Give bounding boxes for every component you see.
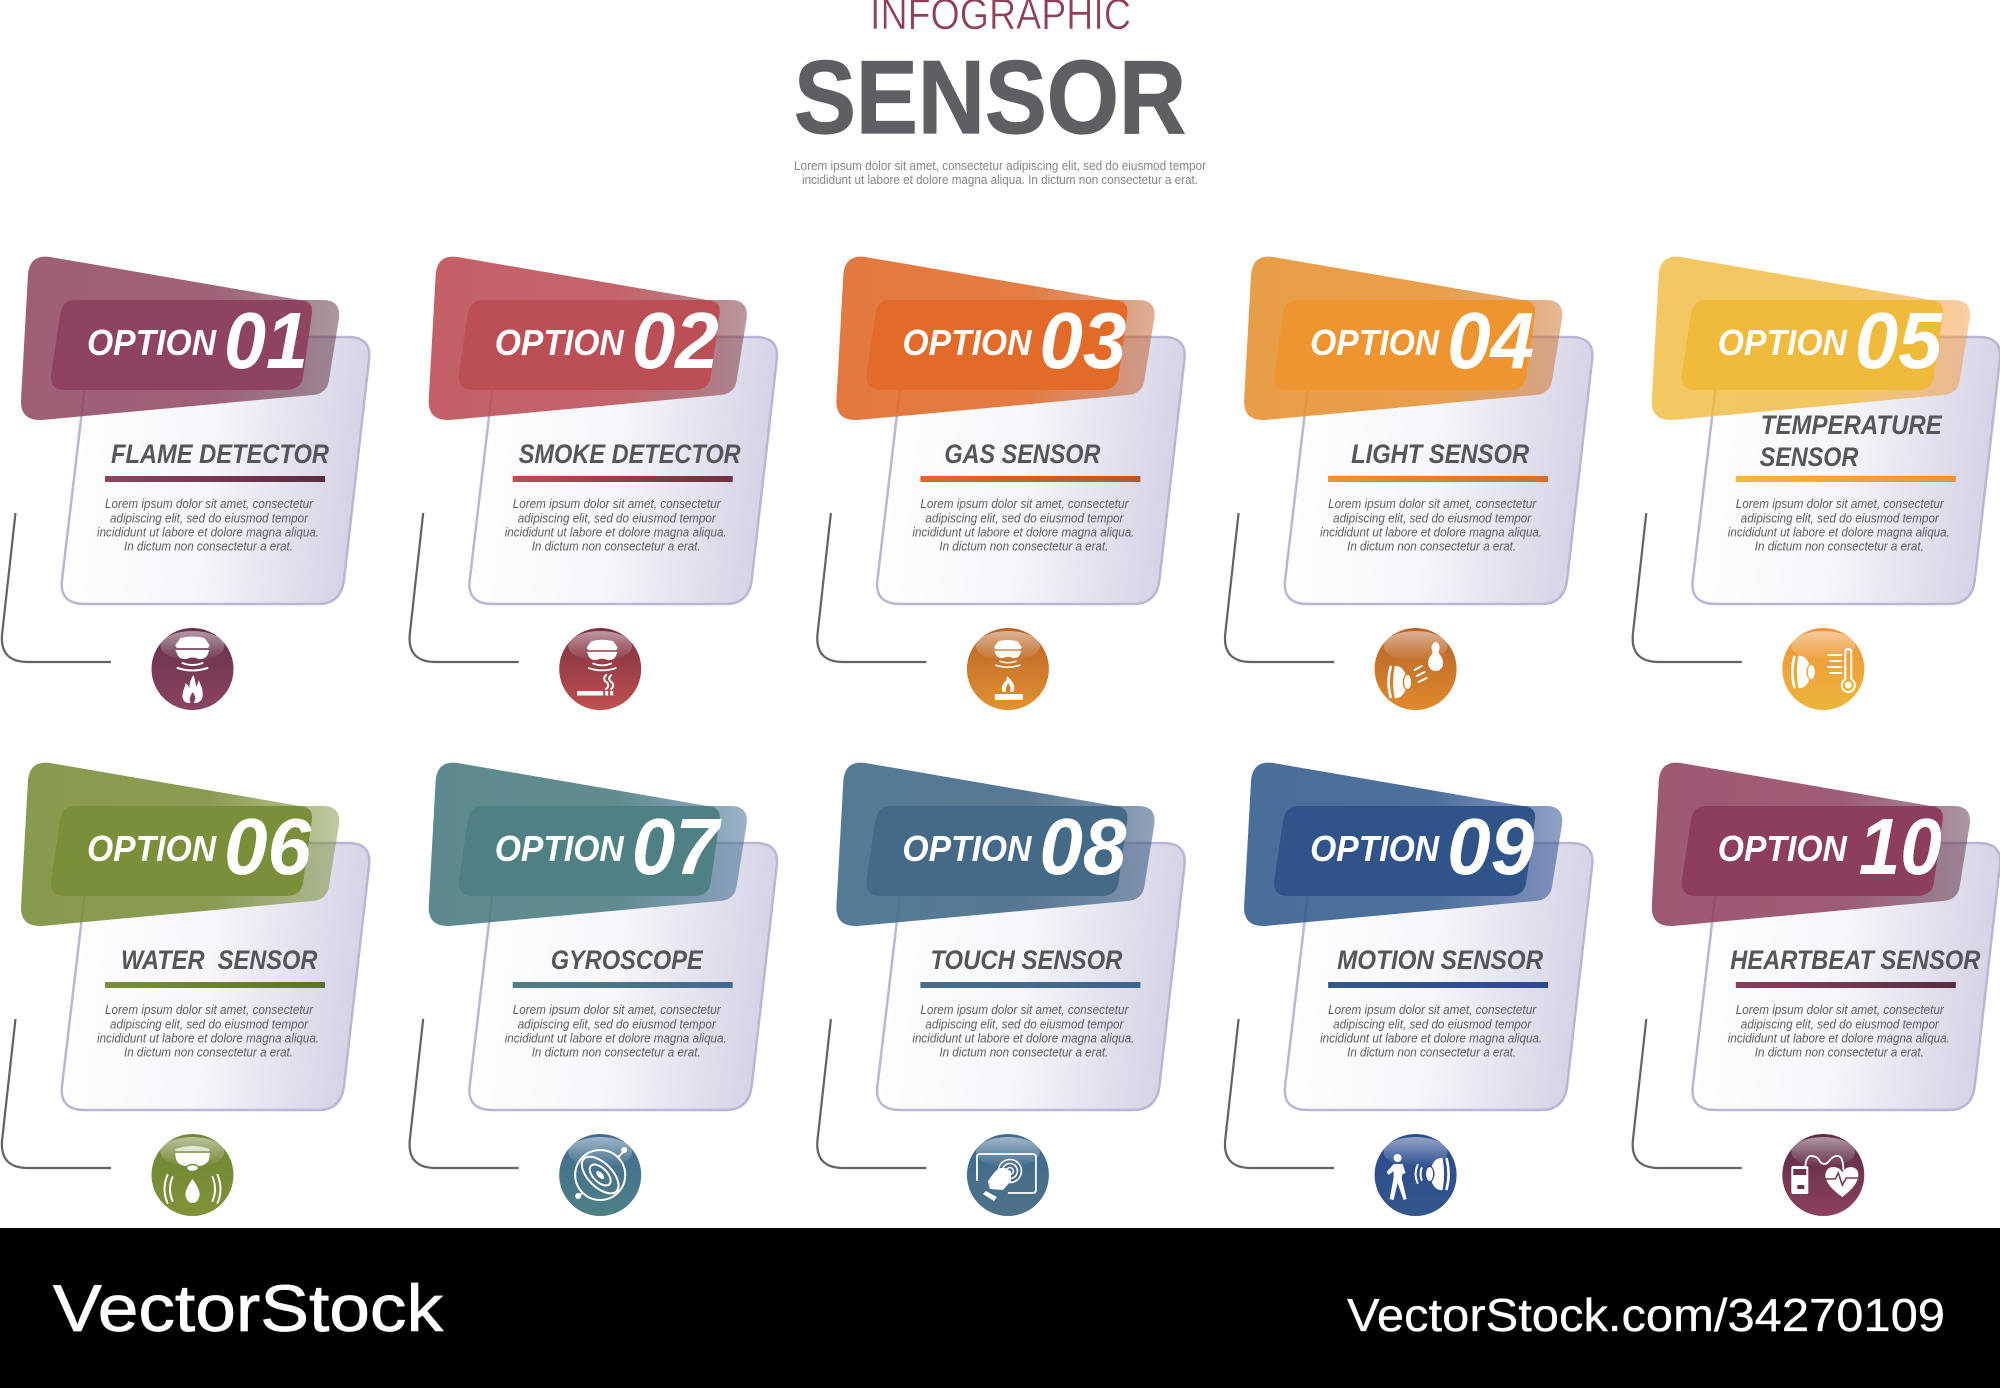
ribbon back (1652, 763, 1970, 926)
heading rule (513, 982, 733, 988)
card heading: LIGHT SENSOR (1351, 439, 1530, 469)
icon: heartbeat sensor (1782, 1134, 1864, 1216)
body text: adipiscing elit, sed do eiusmod tempor (110, 510, 309, 525)
ribbon front (1682, 300, 1943, 390)
ribbon front (51, 806, 312, 896)
panel: option 03 gas sensor (817, 257, 1185, 710)
body text: adipiscing elit, sed do eiusmod tempor (925, 1016, 1124, 1031)
heading rule (920, 982, 1140, 988)
connector line (2, 1019, 111, 1168)
card (1285, 843, 1592, 1110)
connector line (410, 513, 519, 662)
connector line (817, 1019, 926, 1168)
icon: gyroscope (559, 1134, 641, 1216)
body text: Lorem ipsum dolor sit amet, consectetur (920, 1002, 1129, 1017)
panel: option 05 temperature sensor (1633, 257, 2000, 710)
body text: Lorem ipsum dolor sit amet, consectetur (105, 496, 314, 511)
card (1285, 337, 1592, 604)
card (62, 843, 369, 1110)
body text: Lorem ipsum dolor sit amet, consectetur (513, 1002, 721, 1017)
body text (912, 1002, 1134, 1060)
option label: OPTION (902, 828, 1032, 869)
connector line (2, 513, 111, 662)
body text: incididunt ut labore et dolore magna aliqua. (97, 1030, 319, 1046)
subtitle text (794, 159, 1206, 187)
ribbon front (1274, 300, 1535, 390)
body text: In dictum non consectetur a erat. (532, 1045, 701, 1060)
heading rule (513, 476, 733, 482)
header: infographic title block (794, 0, 1206, 187)
card (469, 843, 777, 1110)
connector line (1225, 1019, 1334, 1168)
panel: option 04 light sensor (1225, 257, 1592, 710)
icon: temperature sensor (1782, 628, 1864, 710)
ribbon back (21, 763, 339, 926)
card heading: FLAME DETECTOR (111, 439, 329, 469)
ribbon front (1682, 806, 1943, 896)
body text: In dictum non consectetur a erat. (124, 539, 293, 554)
icon: flame detector (152, 628, 234, 710)
body text: incididunt ut labore et dolore magna aliqua. (912, 1030, 1134, 1046)
card heading: WATER SENSOR (121, 945, 318, 975)
connector line (1633, 1019, 1742, 1168)
body text: Lorem ipsum dolor sit amet, consectetur (105, 1002, 314, 1017)
body text: incididunt ut labore et dolore magna aliqua. (1728, 524, 1950, 540)
option label: OPTION (495, 828, 625, 869)
subtitle text: incididunt ut labore et dolore magna aliqua. In dictum non consectetur a erat. (802, 173, 1198, 187)
ribbon back (429, 257, 747, 420)
body text: Lorem ipsum dolor sit amet, consectetur (1736, 496, 1944, 511)
card (877, 337, 1185, 604)
connector line (1633, 513, 1742, 662)
body text: In dictum non consectetur a erat. (1347, 539, 1516, 554)
connector line (410, 1019, 519, 1168)
body text: incididunt ut labore et dolore magna aliqua. (1320, 1030, 1542, 1046)
body text: In dictum non consectetur a erat. (1347, 1045, 1516, 1060)
body text: In dictum non consectetur a erat. (939, 1045, 1108, 1060)
body text (505, 496, 727, 554)
body text (1728, 1002, 1950, 1060)
body text: incididunt ut labore et dolore magna aliqua. (1320, 524, 1542, 540)
card (877, 843, 1185, 1110)
connector line (1225, 513, 1334, 662)
body text: adipiscing elit, sed do eiusmod tempor (110, 1016, 309, 1031)
body text: adipiscing elit, sed do eiusmod tempor (518, 1016, 716, 1031)
body text: incididunt ut labore et dolore magna aliqua. (505, 524, 727, 540)
option number: 10 (1859, 802, 1942, 891)
card heading: MOTION SENSOR (1337, 945, 1544, 975)
subtitle text: Lorem ipsum dolor sit amet, consectetur adipiscing elit, sed do eiusmod tempor (794, 159, 1206, 173)
heading rule (1328, 982, 1548, 988)
body text: Lorem ipsum dolor sit amet, consectetur (1736, 1002, 1944, 1017)
heading rule (105, 476, 325, 482)
option number: 09 (1447, 802, 1535, 891)
card heading: TOUCH SENSOR (930, 945, 1123, 975)
heading rule (1736, 982, 1956, 988)
heading rule (105, 982, 325, 988)
option number: 07 (632, 802, 722, 891)
body text: incididunt ut labore et dolore magna aliqua. (912, 524, 1134, 540)
body text (505, 1002, 727, 1060)
panel: option 07 gyroscope (410, 763, 777, 1216)
ribbon back (429, 763, 747, 926)
icon: water sensor (152, 1134, 234, 1216)
ribbon front (51, 300, 312, 390)
option label: OPTION (495, 322, 625, 363)
card (62, 337, 369, 604)
heading rule (1328, 476, 1548, 482)
ribbon back (1244, 257, 1562, 420)
body text: Lorem ipsum dolor sit amet, consectetur (1328, 1002, 1537, 1017)
card heading (1760, 410, 1943, 472)
body text (1320, 496, 1542, 554)
panel: option 09 motion sensor (1225, 763, 1592, 1216)
option number: 04 (1447, 296, 1534, 385)
card (1692, 337, 2000, 604)
connector line (817, 513, 926, 662)
heading rule (1736, 476, 1956, 482)
icon: smoke detector (559, 628, 641, 710)
body text: incididunt ut labore et dolore magna aliqua. (97, 524, 319, 540)
body text: Lorem ipsum dolor sit amet, consectetur (1328, 496, 1537, 511)
footer: watermark bar (0, 1228, 2000, 1388)
option number: 02 (632, 296, 719, 385)
card heading: GYROSCOPE (551, 945, 704, 975)
body text: adipiscing elit, sed do eiusmod tempor (1741, 1016, 1939, 1031)
ribbon back (1244, 763, 1562, 926)
body text: In dictum non consectetur a erat. (532, 539, 701, 554)
body text (912, 496, 1134, 554)
card (469, 337, 777, 604)
body text: adipiscing elit, sed do eiusmod tempor (925, 510, 1124, 525)
icon: gas sensor (967, 628, 1049, 710)
ribbon front (866, 300, 1127, 390)
panel: option 08 touch sensor (817, 763, 1185, 1216)
heading rule (920, 476, 1140, 482)
option number: 03 (1039, 296, 1126, 385)
ribbon back (1652, 257, 1970, 420)
ribbon back (836, 257, 1155, 420)
card heading: SENSOR (1760, 442, 1859, 472)
panel: option 06 water sensor (2, 763, 369, 1216)
panel: option 02 smoke detector (410, 257, 777, 710)
option number: 06 (224, 802, 311, 891)
body text: In dictum non consectetur a erat. (939, 539, 1108, 554)
body text: incididunt ut labore et dolore magna aliqua. (1728, 1030, 1950, 1046)
body text: adipiscing elit, sed do eiusmod tempor (1741, 510, 1939, 525)
option label: OPTION (902, 322, 1032, 363)
card heading: TEMPERATURE (1761, 410, 1943, 440)
icon: motion sensor (1375, 1134, 1457, 1216)
option label: OPTION (87, 828, 217, 869)
body text: Lorem ipsum dolor sit amet, consectetur (920, 496, 1129, 511)
option number: 08 (1039, 802, 1127, 891)
icon: touch sensor (967, 1134, 1049, 1216)
ribbon front (866, 806, 1127, 896)
option label: OPTION (1718, 828, 1848, 869)
body text: adipiscing elit, sed do eiusmod tempor (1333, 510, 1532, 525)
body text: adipiscing elit, sed do eiusmod tempor (518, 510, 716, 525)
option label: OPTION (1718, 322, 1848, 363)
ribbon back (836, 763, 1155, 926)
body text: Lorem ipsum dolor sit amet, consectetur (513, 496, 721, 511)
option number: 05 (1855, 296, 1943, 385)
ribbon front (459, 300, 720, 390)
option label: OPTION (1310, 322, 1440, 363)
body text: In dictum non consectetur a erat. (124, 1045, 293, 1060)
card heading: SMOKE DETECTOR (519, 439, 741, 469)
title: SENSOR: SENSOR (794, 40, 1186, 156)
ribbon front (459, 806, 720, 896)
panel: option 10 heartbeat sensor (1633, 763, 2000, 1216)
icon: light sensor (1375, 628, 1457, 710)
option label: OPTION (87, 322, 217, 363)
body text: incididunt ut labore et dolore magna aliqua. (505, 1030, 727, 1046)
body text (97, 1002, 319, 1060)
body text (1320, 1002, 1542, 1060)
option label: OPTION (1310, 828, 1440, 869)
body text (97, 496, 319, 554)
body text: adipiscing elit, sed do eiusmod tempor (1333, 1016, 1532, 1031)
ribbon back (21, 257, 339, 420)
card (1692, 843, 2000, 1110)
body text (1728, 496, 1950, 554)
ribbon front (1274, 806, 1535, 896)
body text: In dictum non consectetur a erat. (1755, 539, 1924, 554)
body text: In dictum non consectetur a erat. (1755, 1045, 1924, 1060)
url and id: VectorStock.com/34270109 (1347, 1289, 1945, 1341)
panel: option 01 flame detector (2, 257, 369, 710)
brand name: VectorStock (53, 1271, 444, 1345)
option number: 01 (224, 296, 308, 385)
card heading: GAS SENSOR (944, 439, 1101, 469)
